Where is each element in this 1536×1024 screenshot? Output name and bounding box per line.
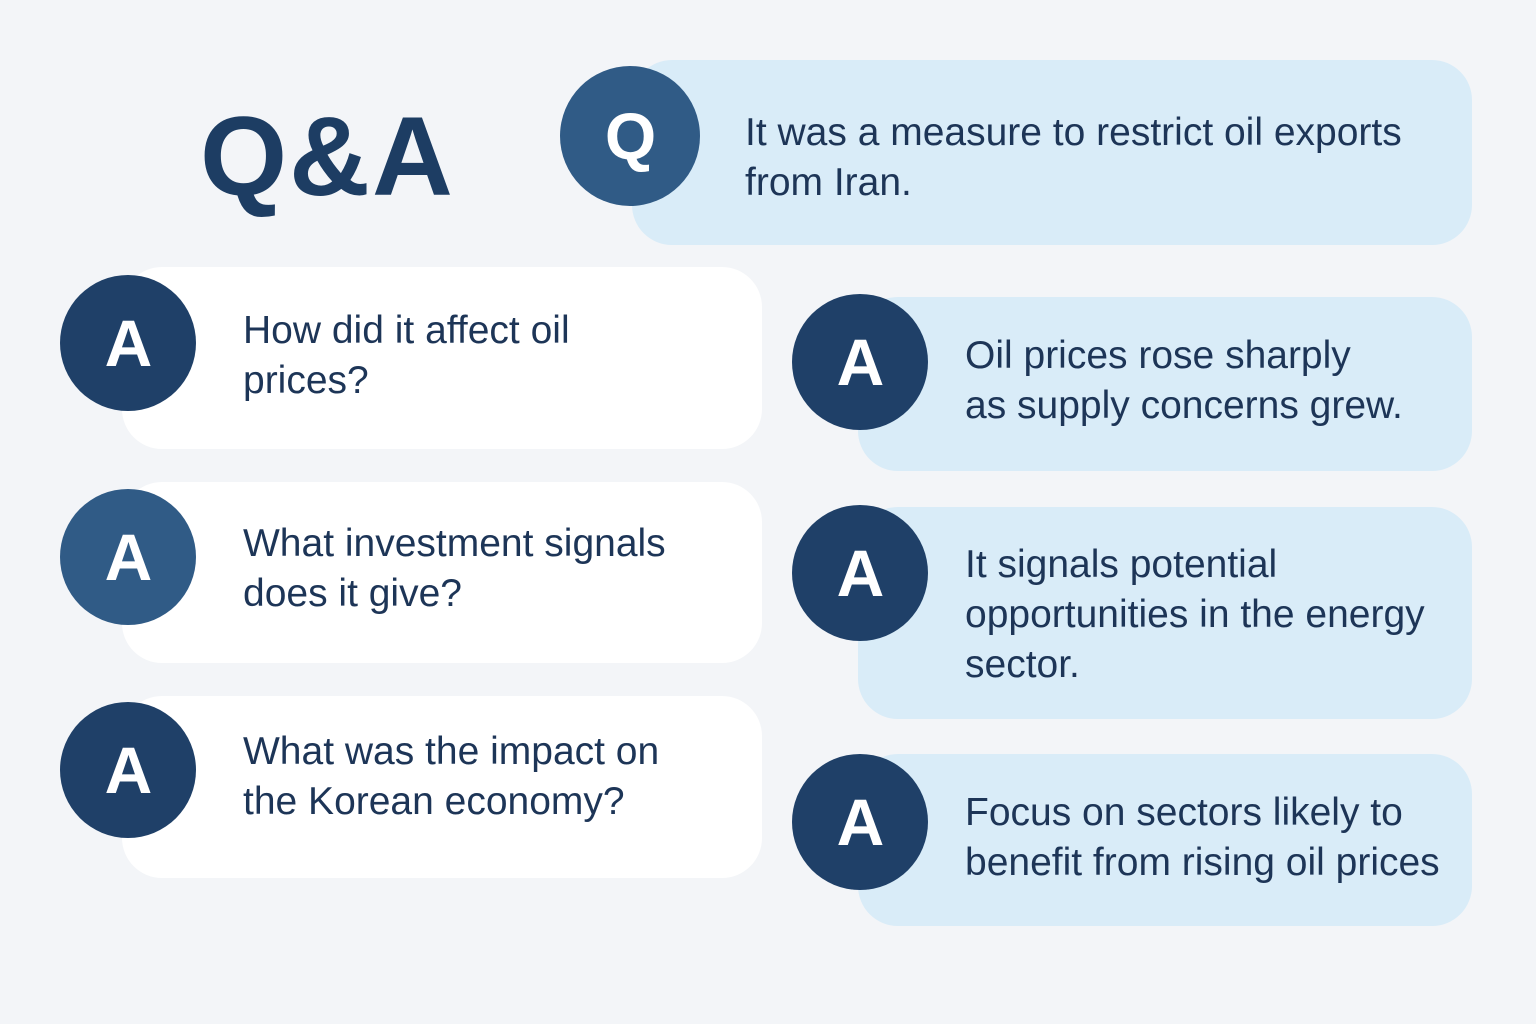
text: opportunities in the energy (965, 593, 1425, 636)
icon: Q circle (560, 66, 700, 206)
panel: right answer 1 (792, 294, 1472, 471)
panel: question bubble (560, 60, 1472, 245)
text: How did it affect oil (243, 309, 570, 352)
bubble background (858, 507, 1472, 719)
text: the Korean economy? (243, 780, 625, 823)
icon: A circle: A (105, 733, 151, 807)
card background (122, 267, 762, 449)
title: Q&A (200, 94, 455, 219)
icon: A circle: A (837, 325, 883, 399)
icon: A circle: A (105, 306, 151, 380)
bubble background (858, 754, 1472, 926)
text: sector. (965, 643, 1080, 686)
text: as supply concerns grew. (965, 384, 1403, 427)
question text (745, 111, 1402, 204)
text: does it give? (243, 572, 462, 615)
icon: A circle: A (105, 520, 151, 594)
icon: A circle (60, 702, 196, 838)
text: benefit from rising oil prices (965, 841, 1440, 884)
card background (122, 482, 762, 663)
text: Focus on sectors likely to (965, 791, 1403, 834)
text (965, 791, 1440, 884)
icon: Q circle: Q (605, 99, 655, 173)
icon: A circle (60, 275, 196, 411)
icon: A circle: A (837, 536, 883, 610)
panel: left card 3 (60, 696, 762, 878)
text (965, 334, 1403, 427)
panel: left card 2 (60, 482, 762, 663)
icon: A circle (792, 754, 928, 890)
text: What was the impact on (243, 730, 659, 773)
text (243, 730, 659, 823)
panel: right answer 3 (792, 754, 1472, 926)
text (243, 522, 666, 615)
text (965, 543, 1425, 686)
icon: A circle: A (837, 785, 883, 859)
card background (122, 696, 762, 878)
icon: A circle (792, 294, 928, 430)
text: prices? (243, 359, 369, 402)
question text: It was a measure to restrict oil exports (745, 111, 1402, 154)
icon: A circle (792, 505, 928, 641)
icon: A circle (60, 489, 196, 625)
panel: left card 1 (60, 267, 762, 449)
panel: right answer 2 (792, 505, 1472, 719)
question text: from Iran. (745, 161, 912, 204)
text: What investment signals (243, 522, 666, 565)
bubble background (858, 297, 1472, 471)
text: It signals potential (965, 543, 1277, 586)
bubble background (632, 60, 1472, 245)
text (243, 309, 570, 402)
text: Oil prices rose sharply (965, 334, 1351, 377)
